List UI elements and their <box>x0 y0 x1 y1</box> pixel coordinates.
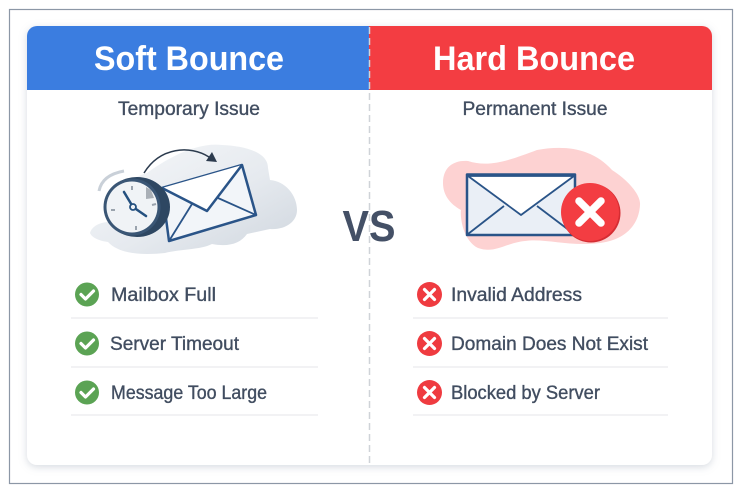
item: mailbox full <box>71 282 318 318</box>
error badge <box>561 183 620 242</box>
soft bounce header: Soft Bounce <box>94 40 284 78</box>
item: message too large: Message Too Large <box>111 383 267 404</box>
item: server timeout <box>71 332 318 367</box>
VS label: VS <box>342 202 396 251</box>
item: domain does not exist: Domain Does Not Exist <box>451 334 649 355</box>
item: invalid address: Invalid Address <box>451 285 582 306</box>
envelope <box>467 174 575 235</box>
item: blocked by server <box>413 380 668 415</box>
clock <box>104 177 170 237</box>
hard bounce header <box>369 26 712 90</box>
icon: soft bounce clock and envelope on cloud <box>90 145 297 254</box>
hard bounce header: Hard Bounce <box>433 40 635 78</box>
envelope <box>162 165 256 241</box>
item: mailbox full: Mailbox Full <box>111 285 216 306</box>
item: blocked by server: Blocked by Server <box>451 383 601 404</box>
item: server timeout: Server Timeout <box>110 334 240 355</box>
item: message too large <box>71 380 318 415</box>
soft bounce header <box>27 26 369 90</box>
list: hard bounce reasons <box>413 282 668 415</box>
cloud <box>90 145 297 254</box>
motion arcs <box>99 171 124 191</box>
list: soft bounce reasons <box>71 282 318 415</box>
soft subtitle: Temporary Issue <box>118 99 260 120</box>
arrow <box>144 150 217 173</box>
icon: hard bounce envelope with error badge <box>443 148 640 250</box>
pink blob <box>443 148 640 250</box>
hard subtitle: Permanent Issue <box>462 99 608 120</box>
item: domain does not exist <box>413 331 668 367</box>
item: invalid address <box>413 282 668 318</box>
